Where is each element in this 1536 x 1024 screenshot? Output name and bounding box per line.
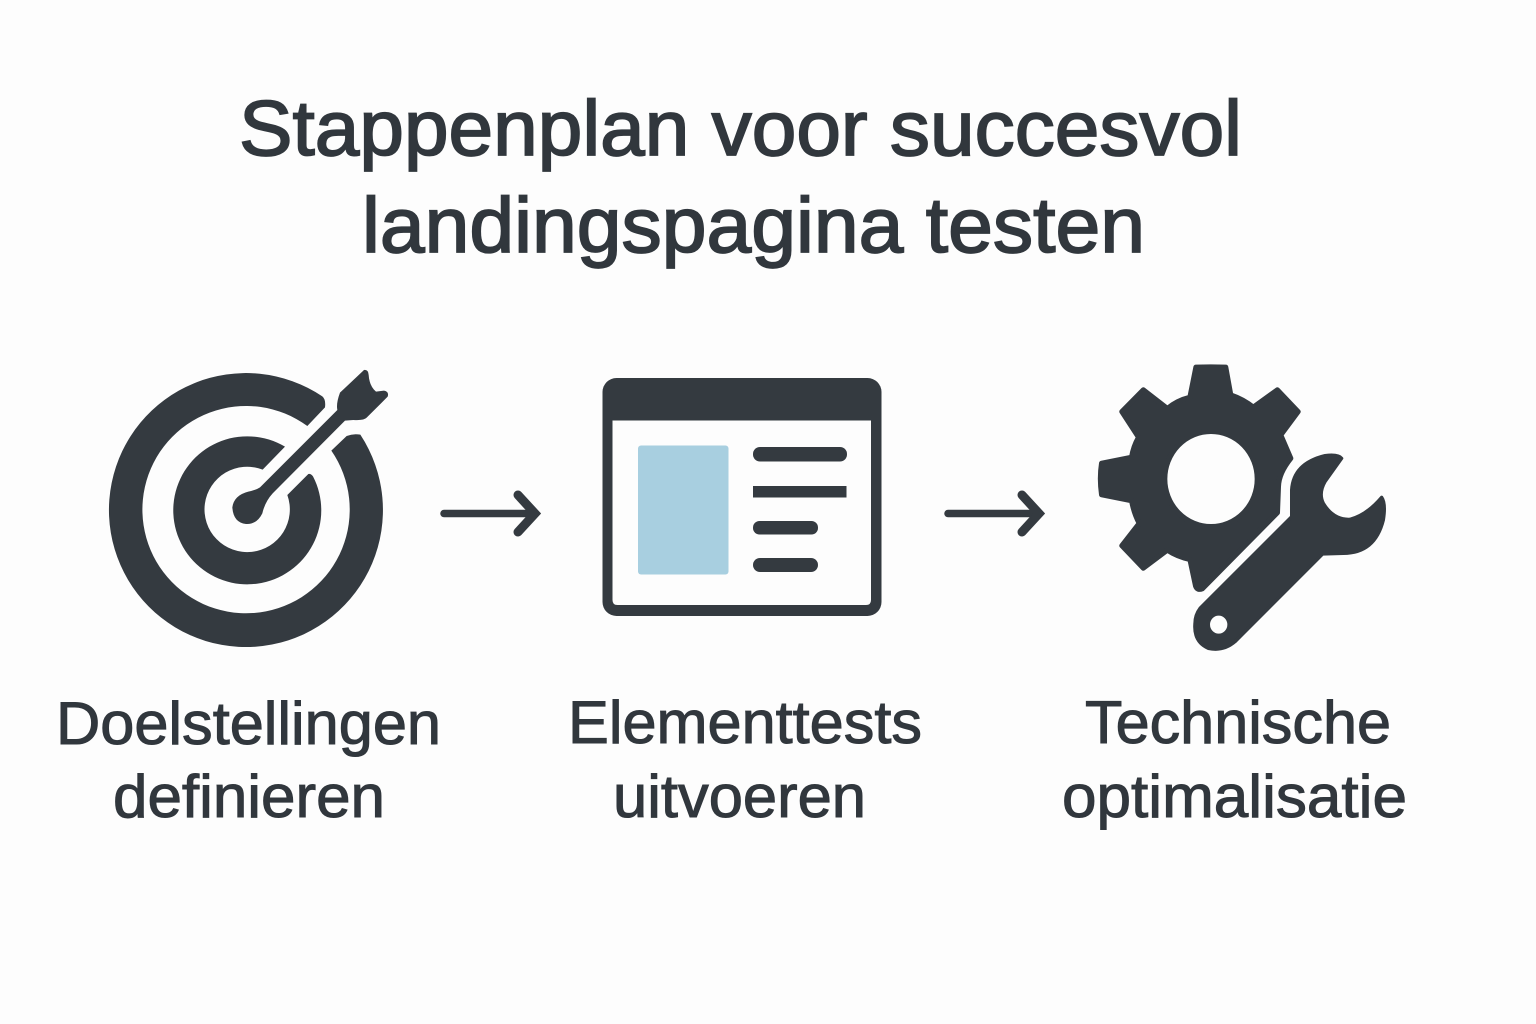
label: Technische optimalisatie: optimalisatie — [1062, 763, 1407, 830]
title — [239, 84, 1242, 269]
wrench — [1195, 455, 1384, 649]
icon: gear and wrench — [1100, 367, 1384, 649]
outer ring — [109, 373, 383, 647]
label: Technische optimalisatie — [1062, 689, 1407, 830]
middle ring — [173, 436, 321, 584]
window frame — [602, 378, 882, 616]
image placeholder — [638, 446, 728, 574]
window content area — [612, 420, 871, 605]
label: Doelstellingen definieren: definieren — [113, 763, 385, 830]
arrow: step 1 to step 2 — [444, 495, 535, 532]
icon: target with arrow — [109, 370, 388, 647]
text lines — [753, 447, 847, 572]
title: Stappenplan voor succesvol — [239, 84, 1242, 172]
label: Technische optimalisatie: Technische — [1085, 689, 1391, 756]
arrow: step 2 to step 3 — [948, 495, 1039, 532]
gear — [1100, 367, 1298, 589]
label: Elementtests uitvoeren: Elementtests — [568, 689, 922, 756]
label: Elementtests uitvoeren: uitvoeren — [613, 763, 866, 830]
title: landingspagina testen — [362, 181, 1145, 269]
arrow — [232, 370, 388, 524]
label: Elementtests uitvoeren — [568, 689, 922, 830]
label: Doelstellingen definieren: Doelstellingen — [56, 690, 441, 757]
label: Doelstellingen definieren — [56, 690, 441, 830]
icon: browser window — [602, 378, 882, 616]
